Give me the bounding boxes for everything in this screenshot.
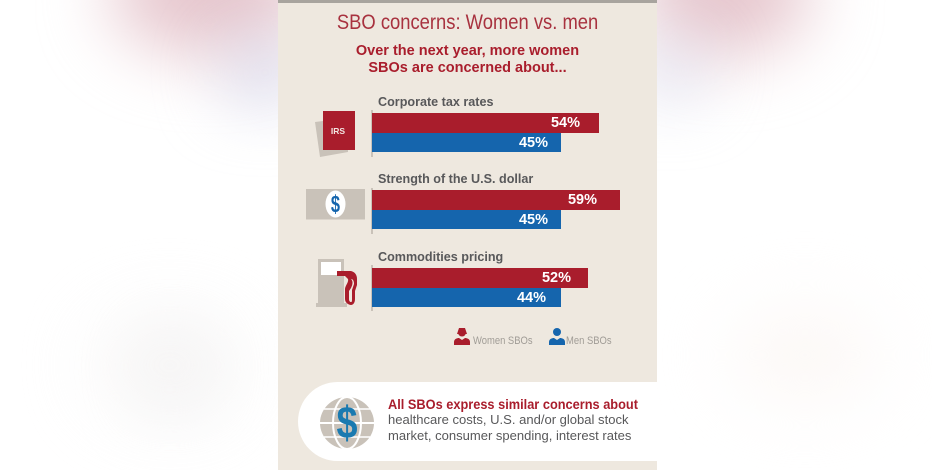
callout heading: All SBOs express similar concerns about [388, 396, 638, 412]
bar men 45%: 45% [519, 134, 548, 150]
icon: woman [454, 328, 470, 345]
bar men 45% [372, 132, 561, 152]
title: SBO concerns: Women vs. men [337, 11, 598, 34]
icon: globe with dollar: $ [336, 396, 358, 447]
subtitle [356, 43, 579, 76]
chart row: strength of the dollar [306, 172, 620, 234]
icon: fuel pump [316, 259, 357, 307]
top rule [278, 0, 657, 3]
icon: dollar bill [306, 189, 365, 220]
bar women 59% [372, 190, 620, 210]
chart row: commodities pricing [316, 250, 588, 311]
icon: IRS book: IRS [331, 126, 345, 136]
bar men 44%: 44% [517, 290, 546, 306]
chart row: corporate tax rates [315, 95, 599, 157]
label: Strength of the U.S. dollar [378, 172, 533, 186]
label: Commodities pricing [378, 250, 503, 264]
label: Corporate tax rates [378, 95, 493, 109]
bar men 44% [372, 288, 561, 307]
callout text: healthcare costs, U.S. and/or global stock [388, 412, 628, 427]
icon: globe with dollar [320, 396, 374, 448]
bar women 52%: 52% [542, 270, 571, 286]
bar women 54% [372, 113, 599, 132]
bar women 54%: 54% [551, 115, 580, 131]
subtitle: Over the next year, more women [356, 43, 579, 59]
bar men 45% [372, 210, 561, 229]
bar men 45%: 45% [519, 212, 548, 228]
legend label men: Men SBOs [566, 335, 611, 347]
legend label women: Women SBOs [473, 335, 533, 347]
callout [298, 382, 657, 461]
legend [454, 328, 612, 347]
bar women 59%: 59% [568, 192, 597, 208]
callout text: market, consumer spending, interest rates [388, 428, 631, 442]
icon: IRS book [315, 111, 355, 157]
callout text [388, 412, 631, 442]
subtitle: SBOs are concerned about... [368, 60, 567, 76]
bar women 52% [372, 268, 588, 288]
icon: man [549, 328, 565, 345]
panel: infographic [278, 0, 657, 470]
icon: dollar bill: $ [331, 191, 341, 218]
